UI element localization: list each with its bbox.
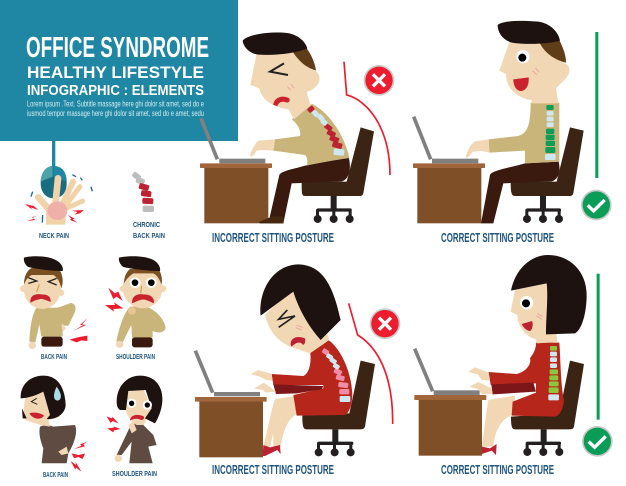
hand bbox=[250, 139, 275, 156]
icon: red cross bbox=[364, 65, 394, 96]
desk bbox=[200, 163, 272, 223]
curved back line bbox=[349, 303, 393, 424]
label: shoulder pain woman: SHOULDER PAIN bbox=[112, 469, 157, 478]
description text: iusmod tempor massage here ghi dolor sit amet, sed do e amet, sedu bbox=[27, 108, 204, 118]
spine bbox=[307, 105, 345, 156]
face bbox=[279, 310, 305, 347]
scene: man correct posture bbox=[413, 21, 612, 223]
torso and arm bbox=[489, 103, 559, 163]
figure: man shoulder pain bbox=[105, 256, 166, 348]
icon: green check bbox=[581, 190, 612, 220]
header panel bbox=[0, 0, 238, 141]
description text: Lorem ipsum .Text. Subtitle massage here ghi dolor sit amet, sed do e bbox=[27, 98, 204, 108]
face bbox=[520, 296, 543, 331]
scene: man incorrect posture bbox=[200, 32, 394, 223]
desk bbox=[413, 163, 485, 223]
head bbox=[250, 52, 320, 119]
hair bbox=[511, 255, 587, 334]
hair bbox=[243, 32, 307, 55]
figure: man back pain bbox=[20, 256, 88, 349]
scene: woman incorrect posture bbox=[195, 264, 400, 457]
label: shoulder pain: SHOULDER PAIN bbox=[116, 352, 155, 361]
face bbox=[270, 63, 294, 106]
icon: mouse and hurting hand (neck pain) bbox=[25, 140, 92, 225]
straight back line bbox=[597, 274, 600, 420]
label: neck pain: NECK PAIN bbox=[39, 231, 69, 240]
spine bbox=[548, 346, 559, 400]
icon: green check bbox=[582, 426, 613, 457]
hands bbox=[468, 367, 493, 394]
label: correct sitting posture bottom: CORRECT SITTING POSTURE bbox=[441, 463, 554, 477]
label: chronic back pain: CHRONIC bbox=[133, 220, 160, 229]
label: correct sitting posture top: CORRECT SITTING POSTURE bbox=[441, 231, 554, 245]
scene: woman correct posture bbox=[414, 255, 613, 457]
hair side bbox=[293, 48, 316, 71]
icon: chronic back pain spine bbox=[131, 171, 154, 212]
legs bbox=[482, 396, 515, 447]
chair bbox=[511, 127, 584, 223]
dress bbox=[489, 343, 564, 417]
face bbox=[513, 50, 539, 91]
sleeve bbox=[273, 384, 323, 394]
icon: red cross bbox=[370, 308, 400, 339]
head bbox=[265, 290, 329, 353]
desk bbox=[195, 397, 267, 457]
hair bbox=[260, 264, 341, 340]
hair bbox=[498, 21, 560, 44]
desk bbox=[414, 395, 486, 456]
spine bbox=[321, 348, 350, 402]
chair bbox=[302, 127, 374, 223]
label: chronic back pain bbox=[133, 220, 165, 240]
legs bbox=[481, 162, 559, 223]
figure: woman back pain bbox=[21, 376, 87, 472]
laptop bbox=[195, 351, 260, 396]
sleeve bbox=[491, 383, 536, 394]
head bbox=[511, 283, 557, 343]
torso and arm bbox=[273, 104, 349, 166]
chair bbox=[511, 361, 584, 456]
subtitle: HEALTHY LIFESTYLE bbox=[27, 63, 204, 82]
shoe bbox=[482, 444, 497, 455]
subtitle line 2: INFOGRAPHIC : ELEMENTS bbox=[27, 83, 204, 99]
description text bbox=[27, 98, 204, 118]
legs bbox=[263, 396, 297, 447]
hair side bbox=[540, 40, 566, 63]
shoes bbox=[263, 445, 281, 456]
laptop bbox=[414, 117, 478, 163]
curved back line bbox=[344, 62, 390, 175]
dress bbox=[272, 340, 352, 416]
label: incorrect sitting posture top: INCORRECT SITTING POSTURE bbox=[212, 231, 334, 245]
legs bbox=[268, 157, 350, 223]
straight back line bbox=[595, 32, 598, 178]
laptop bbox=[415, 349, 480, 395]
figure: woman shoulder pain bbox=[107, 376, 162, 463]
chair bbox=[302, 361, 375, 456]
head bbox=[499, 38, 570, 103]
hand bbox=[466, 139, 489, 158]
shoe bbox=[259, 216, 283, 223]
label: incorrect sitting posture bottom: INCORRECT SITTING POSTURE bbox=[212, 463, 334, 477]
label: chronic back pain: BACK PAIN bbox=[133, 231, 165, 240]
spine bbox=[545, 105, 556, 160]
hands bbox=[251, 370, 276, 393]
title: OFFICE SYNDROME bbox=[26, 32, 209, 64]
label: back pain: BACK PAIN bbox=[41, 352, 67, 361]
label: back pain woman: BACK PAIN bbox=[43, 470, 68, 479]
laptop bbox=[201, 118, 265, 163]
